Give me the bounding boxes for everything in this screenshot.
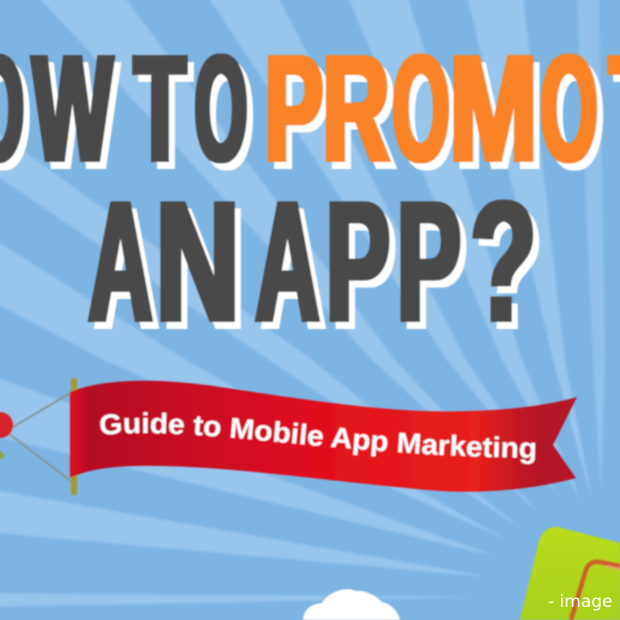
banner ropes	[8, 392, 72, 482]
title text AN APP?: P	[397, 166, 461, 358]
icon: green app tile with phone	[520, 527, 620, 620]
title shadow line 1: O	[398, 30, 456, 200]
title text AN APP?: N	[156, 166, 240, 358]
title shadow line 2: A	[94, 174, 158, 364]
title words: OW TO: T	[134, 24, 186, 192]
title text AN APP?: ?	[470, 166, 536, 358]
title text AN APP?: P	[326, 166, 390, 358]
cloud	[303, 589, 400, 620]
title shadow line 1: R	[328, 30, 396, 200]
red ball	[0, 412, 13, 438]
title shadow line 1: P	[271, 30, 329, 200]
title shadow line 1	[0, 60, 620, 172]
title word: PROMOTE: O	[392, 24, 450, 192]
title line 1: HOW TO PROMOTE: O	[195, 24, 247, 192]
title shadow line 1: T	[140, 30, 192, 200]
title shadow line 1: O	[201, 30, 253, 200]
title text AN APP?: A	[256, 166, 320, 358]
title shadow line 2: P	[403, 174, 467, 364]
title shadow line 2: ?	[476, 174, 542, 364]
title word: PROMOTE: R	[322, 24, 390, 192]
green tip	[0, 450, 5, 460]
title text AN APP?: A	[88, 166, 152, 358]
title shadow line 2: A	[262, 174, 326, 364]
title line 1: HOW TO PROMOTE	[0, 52, 620, 172]
banner pole	[71, 378, 77, 495]
title shadow line 2	[93, 207, 540, 330]
title words: OW TO: W	[32, 24, 113, 192]
title words: OW TO	[0, 52, 248, 164]
title word: PROMOTE: M	[450, 24, 538, 192]
title word: PROMOTE: P	[265, 24, 323, 192]
title shadow line 1: W	[38, 30, 119, 200]
title shadow line 2: P	[332, 174, 396, 364]
title shadow line 1: M	[456, 30, 544, 200]
red ribbon banner	[70, 381, 577, 492]
title word: PROMOTE	[266, 52, 620, 164]
title line 2: AN APP?	[86, 198, 540, 330]
caption: image label: - image	[548, 592, 612, 612]
title text AN APP?	[86, 198, 534, 323]
banner text: Guide to Mobile App Marketing	[99, 410, 536, 466]
title shadow line 2: N	[162, 174, 246, 364]
